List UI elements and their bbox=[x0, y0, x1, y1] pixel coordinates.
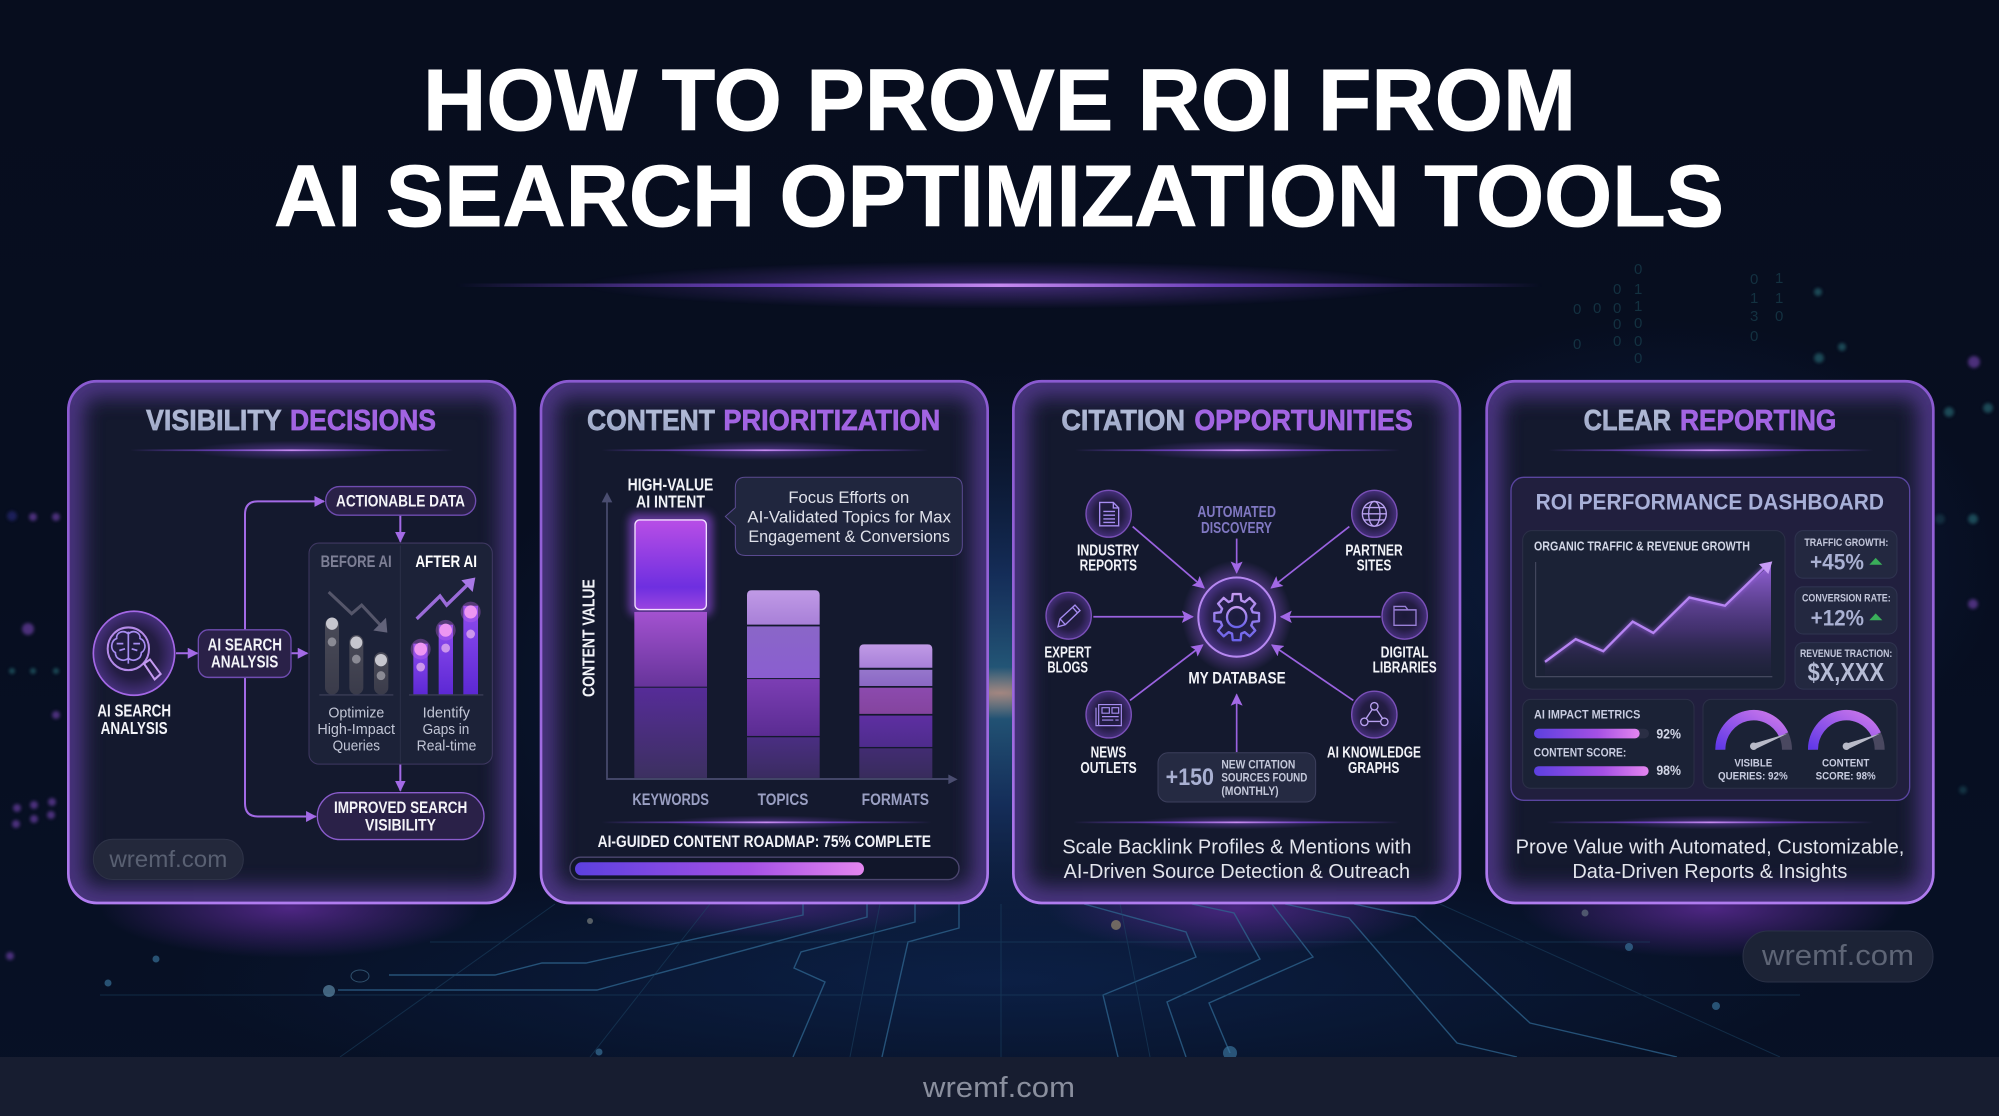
heading bbox=[146, 405, 436, 436]
icon: brain in magnifier bbox=[93, 611, 175, 695]
gauge: content score bbox=[1813, 715, 1880, 782]
ai impact metrics card: 92% bbox=[1656, 726, 1681, 741]
stat: traffic growth: +45% bbox=[1810, 549, 1864, 575]
footer bar: wremf.com bbox=[922, 1072, 1075, 1104]
line chart card bbox=[1523, 531, 1785, 689]
title bbox=[274, 52, 1724, 245]
bar: formats bbox=[859, 644, 932, 778]
heading divider bbox=[1548, 441, 1873, 460]
background: 0 bbox=[1775, 308, 1783, 325]
stat box: +150 new citation sources: SOURCES FOUND bbox=[1221, 771, 1307, 785]
summary text: Prove Value with Automated, Customizable, bbox=[1516, 836, 1904, 859]
box: ai search analysis bbox=[198, 630, 291, 677]
lower divider bbox=[1073, 815, 1400, 829]
label: high-value ai intent bbox=[628, 475, 713, 512]
heading: CITATION bbox=[1061, 405, 1185, 436]
category labels bbox=[632, 792, 929, 809]
category labels: KEYWORDS bbox=[632, 792, 709, 809]
background: 3 bbox=[1750, 308, 1758, 325]
node: industry reports bbox=[1077, 490, 1139, 575]
stat: revenue traction bbox=[1795, 643, 1897, 689]
before label: BEFORE AI bbox=[321, 554, 392, 571]
axis label: content value: CONTENT VALUE bbox=[579, 579, 598, 697]
background: 1 bbox=[1775, 290, 1783, 307]
heading divider bbox=[1075, 441, 1400, 460]
stat: conversion rate: CONVERSION RATE: bbox=[1802, 592, 1891, 604]
callout: Focus Efforts on bbox=[788, 490, 909, 507]
category labels: TOPICS bbox=[758, 792, 808, 809]
after caption: Real-time bbox=[417, 739, 476, 755]
label: high-value ai intent: AI INTENT bbox=[636, 492, 706, 512]
after caption: Identify bbox=[423, 705, 471, 722]
node: digital libraries: DIGITAL bbox=[1381, 644, 1429, 661]
background: 0 bbox=[1750, 271, 1758, 288]
node: partner sites: PARTNER bbox=[1345, 542, 1403, 560]
panel: before and after comparison bbox=[309, 543, 492, 764]
pill: actionable data bbox=[326, 487, 476, 515]
bar: topics bbox=[747, 590, 820, 778]
background: 0 bbox=[1573, 336, 1581, 353]
before caption: Optimize bbox=[328, 705, 384, 722]
heading: PRIORITIZATION bbox=[723, 405, 940, 436]
label: automated discovery bbox=[1197, 504, 1276, 537]
node: partner sites: SITES bbox=[1357, 557, 1391, 575]
bar: keywords bbox=[628, 513, 713, 778]
node: expert blogs: EXPERT bbox=[1044, 644, 1092, 661]
background: 0 bbox=[1613, 333, 1621, 350]
heading bbox=[1584, 405, 1836, 436]
category labels: FORMATS bbox=[862, 792, 929, 809]
box: ai search analysis: AI SEARCH bbox=[208, 635, 282, 655]
arrows: flow lines bbox=[176, 501, 400, 817]
background: 0 bbox=[1634, 261, 1642, 278]
node: news outlets: OUTLETS bbox=[1080, 760, 1137, 777]
before caption bbox=[317, 705, 395, 755]
gauges card bbox=[1703, 699, 1897, 788]
progress bar bbox=[570, 857, 959, 880]
after caption bbox=[417, 705, 476, 755]
heading: CLEAR bbox=[1584, 405, 1671, 436]
stat box: +150 new citation sources: (MONTHLY) bbox=[1221, 784, 1279, 798]
callout: Engagement & Conversions bbox=[748, 529, 950, 546]
lower divider bbox=[602, 815, 932, 829]
footer bar bbox=[0, 1057, 1999, 1116]
pill: improved search visibility: VISIBILITY bbox=[365, 815, 436, 834]
stat: traffic growth: TRAFFIC GROWTH: bbox=[1804, 537, 1888, 549]
node: expert blogs: BLOGS bbox=[1047, 659, 1088, 677]
heading: REPORTING bbox=[1680, 405, 1836, 436]
stat box: +150 new citation sources: +150 bbox=[1166, 765, 1214, 791]
pill: improved search visibility bbox=[317, 793, 484, 840]
label: ai search analysis: ANALYSIS bbox=[101, 719, 168, 738]
gauge: visible queries bbox=[1718, 715, 1788, 782]
summary text bbox=[1516, 836, 1904, 883]
roadmap label: AI-GUIDED CONTENT ROADMAP: 75% COMPLETE bbox=[598, 834, 931, 851]
ai impact metrics card: 98% bbox=[1656, 763, 1681, 778]
label: ai search analysis bbox=[97, 701, 171, 738]
dashboard bbox=[1511, 477, 1910, 800]
arrows into hub bbox=[1093, 527, 1381, 752]
background: 1 bbox=[1775, 270, 1783, 287]
node: digital libraries: LIBRARIES bbox=[1373, 659, 1437, 677]
label: my database: MY DATABASE bbox=[1188, 668, 1286, 688]
after label: AFTER AI bbox=[415, 554, 477, 571]
before chart bbox=[319, 592, 393, 695]
node: ai knowledge graphs bbox=[1327, 691, 1421, 777]
background: 0 bbox=[1573, 301, 1581, 318]
node: news outlets: NEWS bbox=[1091, 744, 1126, 761]
title divider bbox=[456, 261, 1542, 309]
label: high-value ai intent: HIGH-VALUE bbox=[628, 475, 713, 494]
panel: content prioritization bbox=[541, 381, 988, 903]
pill: actionable data: ACTIONABLE DATA bbox=[336, 491, 465, 511]
background: 1 bbox=[1750, 290, 1758, 307]
stat: conversion rate: +12% bbox=[1811, 605, 1864, 630]
gauge: visible queries: QUERIES: 92% bbox=[1718, 770, 1788, 782]
background: 0 bbox=[1634, 333, 1642, 350]
summary text: Scale Backlink Profiles & Mentions with bbox=[1062, 836, 1411, 859]
pill: improved search visibility: IMPROVED SEARCH bbox=[334, 798, 467, 817]
background: 0 bbox=[1613, 316, 1621, 333]
before caption: Queries bbox=[333, 739, 380, 755]
stat: revenue traction: REVENUE TRACTION: bbox=[1800, 648, 1892, 660]
background: 0 bbox=[1613, 281, 1621, 298]
gauge: content score: SCORE: 98% bbox=[1816, 770, 1876, 782]
heading: VISIBILITY bbox=[146, 405, 282, 436]
heading bbox=[587, 405, 940, 436]
watermark: wremf.com bbox=[108, 846, 227, 872]
title: HOW TO PROVE ROI FROM bbox=[423, 52, 1576, 149]
heading divider bbox=[130, 441, 453, 460]
background: 0 bbox=[1634, 315, 1642, 332]
heading divider bbox=[602, 441, 928, 460]
ai impact metrics card bbox=[1523, 699, 1694, 788]
heading: CONTENT bbox=[587, 405, 715, 436]
callout: AI-Validated Topics for Max bbox=[747, 509, 951, 526]
after chart bbox=[409, 578, 483, 695]
node: ai knowledge graphs: AI KNOWLEDGE bbox=[1327, 744, 1421, 761]
panel: citation opportunities bbox=[1013, 381, 1460, 903]
ai impact metrics card: CONTENT SCORE: bbox=[1534, 745, 1626, 760]
lower divider bbox=[1547, 815, 1873, 829]
line chart card: ORGANIC TRAFFIC & REVENUE GROWTH bbox=[1534, 539, 1750, 554]
heading: OPPORTUNITIES bbox=[1194, 405, 1413, 436]
panel: visibility decisions bbox=[68, 381, 515, 903]
watermark: lower right bbox=[1743, 931, 1933, 982]
node: industry reports: INDUSTRY bbox=[1077, 542, 1139, 560]
chart axes bbox=[602, 492, 958, 784]
gauge: visible queries: VISIBLE bbox=[1734, 757, 1773, 770]
heading: DECISIONS bbox=[290, 405, 436, 436]
stat: traffic growth bbox=[1795, 531, 1897, 578]
node: digital libraries bbox=[1373, 592, 1437, 677]
background: 0 bbox=[1634, 350, 1642, 367]
before caption: High-Impact bbox=[317, 722, 395, 738]
background: 1 bbox=[1634, 298, 1642, 315]
label: automated discovery: DISCOVERY bbox=[1201, 520, 1272, 537]
node: news outlets bbox=[1080, 691, 1137, 777]
watermark: lower right: wremf.com bbox=[1761, 940, 1914, 972]
summary text: AI-Driven Source Detection & Outreach bbox=[1064, 861, 1410, 883]
stat: conversion rate bbox=[1795, 587, 1897, 634]
background: 0 bbox=[1593, 300, 1601, 317]
stat: revenue traction: $X,XXX bbox=[1808, 658, 1884, 687]
background: 0 bbox=[1750, 328, 1758, 345]
title: AI SEARCH OPTIMIZATION TOOLS bbox=[274, 148, 1724, 245]
watermark bbox=[93, 839, 243, 880]
stat box: +150 new citation sources bbox=[1158, 753, 1316, 802]
box: ai search analysis: ANALYSIS bbox=[211, 652, 278, 672]
dashboard title: ROI PERFORMANCE DASHBOARD bbox=[1536, 489, 1884, 514]
node: expert blogs bbox=[1044, 592, 1092, 677]
heading bbox=[1061, 405, 1413, 436]
stat box: +150 new citation sources: NEW CITATION bbox=[1221, 757, 1295, 772]
gauge: content score: CONTENT bbox=[1822, 757, 1869, 770]
label: ai search analysis: AI SEARCH bbox=[97, 701, 171, 721]
after caption: Gaps in bbox=[423, 722, 469, 738]
background: 1 bbox=[1634, 281, 1642, 298]
hub: gear database bbox=[1182, 560, 1292, 674]
panel: clear reporting bbox=[1487, 381, 1933, 903]
node: partner sites bbox=[1345, 490, 1403, 575]
node: ai knowledge graphs: GRAPHS bbox=[1348, 760, 1399, 777]
node: industry reports: REPORTS bbox=[1080, 557, 1137, 575]
callout bbox=[725, 477, 962, 555]
label: automated discovery: AUTOMATED bbox=[1197, 504, 1276, 521]
ai impact metrics card: AI IMPACT METRICS bbox=[1534, 708, 1640, 722]
background: 0 bbox=[1613, 300, 1621, 317]
summary text bbox=[1062, 836, 1411, 883]
summary text: Data-Driven Reports & Insights bbox=[1572, 861, 1848, 883]
